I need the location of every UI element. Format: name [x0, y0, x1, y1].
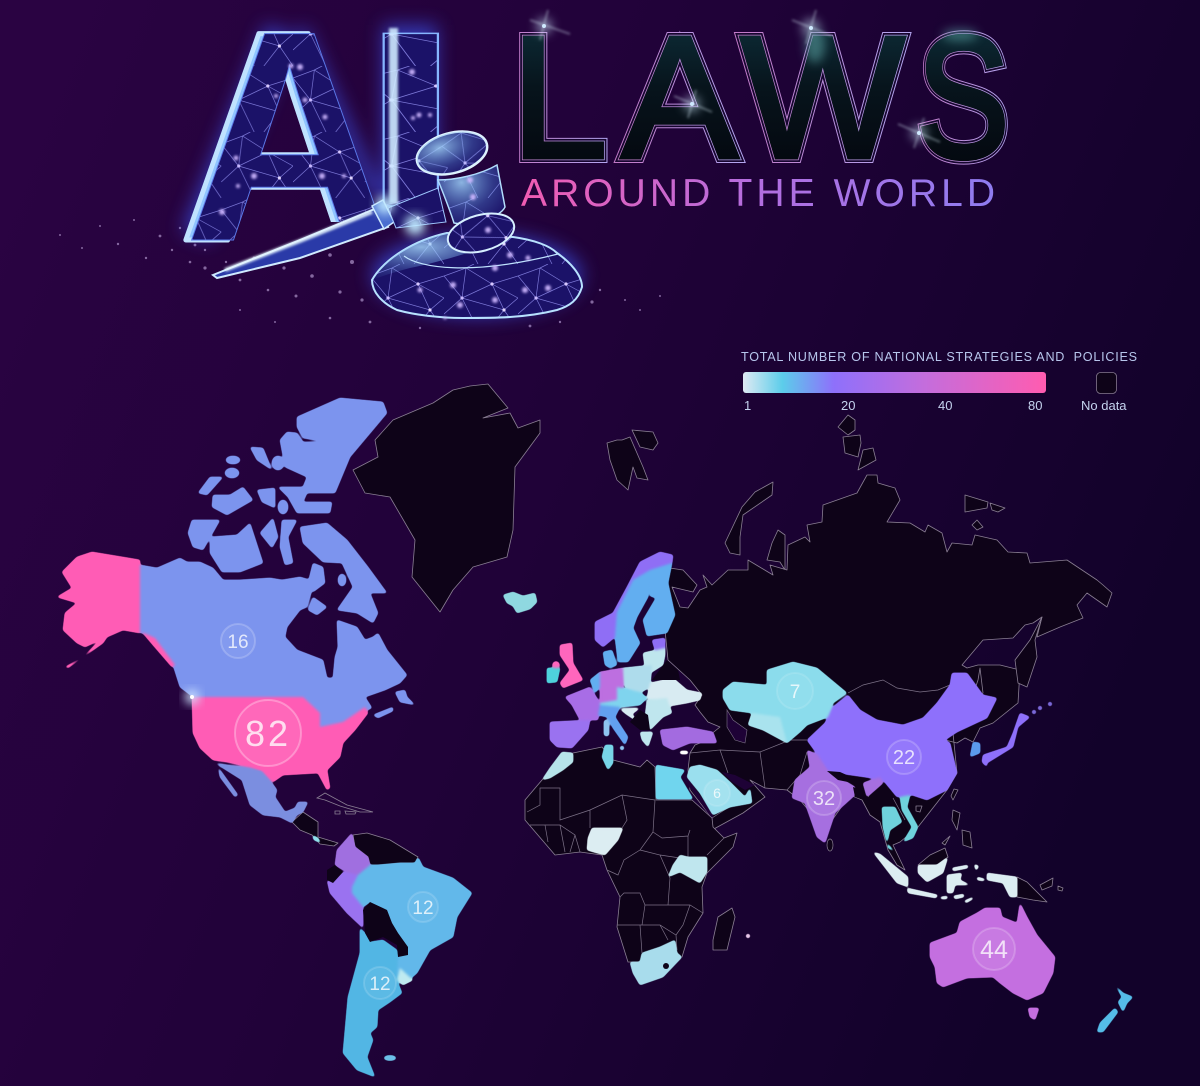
Italy — [598, 705, 628, 745]
title: LAWS: S — [917, 1, 1009, 195]
gavel head — [412, 124, 519, 259]
title: LAWS: L — [511, 0, 607, 194]
title: LAWS: L — [511, 0, 607, 194]
scale labels — [744, 398, 1127, 413]
Colombia — [335, 833, 370, 875]
scale labels: 20 — [841, 398, 855, 413]
Africa borders — [527, 788, 724, 953]
India — [792, 750, 855, 843]
Finland — [643, 563, 675, 636]
Tasmania — [1028, 1008, 1039, 1020]
Taiwan and Hainan — [916, 789, 958, 812]
Alaska panhandle — [142, 632, 175, 667]
gavel base — [372, 233, 582, 318]
title: LAWS: A — [622, 0, 738, 194]
Sweden — [615, 570, 650, 662]
Vietnam — [900, 795, 918, 842]
Caspian Sea — [727, 710, 747, 743]
Papua New Guinea — [1017, 877, 1047, 902]
Alaska — [57, 552, 140, 668]
title: LAWS: A — [622, 0, 738, 194]
title: LAWS — [511, 0, 1009, 195]
value bubble: Brazil 12: 12 — [412, 898, 434, 919]
value bubble: India 32: 32 — [813, 788, 835, 810]
Asia borders — [690, 680, 950, 820]
north-east India — [863, 777, 883, 797]
Spain and Portugal — [550, 720, 590, 748]
Madagascar — [713, 908, 735, 950]
Kazakhstan — [723, 662, 847, 743]
coast sparkle — [185, 690, 199, 704]
Red Sea — [682, 775, 713, 820]
Ireland — [547, 668, 560, 683]
title artwork: AI with gavel — [59, 0, 661, 329]
South Korea — [970, 742, 980, 757]
value bubble: China 22 — [887, 740, 921, 774]
coloured countries — [57, 398, 1133, 1077]
Indonesia — [873, 852, 1017, 903]
Canada — [140, 398, 415, 727]
Bangladesh — [853, 787, 864, 800]
Norway — [595, 552, 673, 647]
value bubble: Saudi Arabia 6 — [704, 780, 730, 806]
legend title: TOTAL NUMBER OF NATIONAL STRATEGIES AND POLICIES — [741, 350, 1137, 364]
Sri Lanka — [827, 839, 833, 851]
Africa — [525, 747, 737, 962]
Uruguay — [397, 968, 413, 985]
Brazil — [352, 857, 472, 985]
legend — [741, 350, 1137, 413]
scale labels: 80 — [1028, 398, 1042, 413]
United Kingdom — [560, 643, 583, 688]
USA — [192, 697, 368, 790]
title: LAWS: L — [511, 0, 607, 194]
Costa Rica — [312, 835, 321, 843]
Falkland Islands — [384, 1056, 396, 1060]
Estonia — [652, 638, 665, 650]
Saudi Arabia — [687, 765, 752, 815]
value bubble: Saudi Arabia 6: 6 — [713, 785, 721, 801]
Greenland — [353, 384, 540, 612]
subtitle: AROUND THE WORLD — [521, 172, 995, 215]
value bubble: Australia 44: 44 — [980, 936, 1008, 964]
title: LAWS: W — [741, 0, 904, 194]
title: LAWS: S — [917, 1, 1009, 195]
Borneo north — [918, 848, 948, 865]
Greece — [640, 732, 653, 747]
scale labels: 1 — [744, 398, 751, 413]
value bubble: USA 82: 82 — [245, 713, 291, 754]
no data swatch — [1096, 372, 1116, 394]
value bubble: Argentina 12 — [364, 967, 396, 999]
value bubble: Kazakhstan 7 — [777, 673, 813, 709]
value bubble: Argentina 12: 12 — [369, 974, 391, 995]
value bubble: India 32 — [807, 781, 841, 815]
title: LAWS: W — [741, 0, 904, 194]
title: LAWS: W — [741, 0, 904, 194]
colour scale — [743, 372, 1046, 393]
Argentina and Chile — [343, 928, 402, 1077]
title sparkles — [530, 10, 978, 148]
glow behind letters — [196, 25, 582, 317]
Russia, Middle East and dark Asia — [663, 475, 1112, 870]
title: LAWS: A — [622, 0, 738, 194]
New Zealand — [1097, 985, 1133, 1032]
title: LAWS: S — [917, 1, 1009, 195]
Japan — [982, 713, 1030, 767]
Poland — [623, 665, 652, 693]
Lesotho — [663, 963, 669, 969]
Baja California — [218, 767, 238, 797]
Bolivia and Paraguay — [363, 902, 408, 957]
Venezuela and the Guianas — [353, 833, 418, 865]
Sakhalin and far-east slivers — [972, 617, 1042, 698]
Central America — [292, 812, 338, 846]
Ecuador — [327, 865, 343, 883]
Thailand — [882, 807, 902, 852]
Mauritius — [746, 934, 750, 938]
Ukraine — [647, 678, 702, 706]
value bubble: Australia 44 — [973, 928, 1015, 970]
Belarus — [652, 660, 680, 680]
Netherlands and Belgium — [590, 672, 600, 693]
central Europe — [600, 687, 647, 707]
scale labels: No data — [1081, 398, 1127, 413]
Nigeria — [587, 828, 623, 855]
Germany — [600, 668, 623, 703]
Sardinia and Sicily — [604, 720, 624, 750]
gavel handle — [213, 188, 446, 278]
Lithuania and Latvia — [643, 648, 665, 672]
Romania and Bulgaria — [645, 698, 672, 730]
value bubble: USA 82 — [235, 700, 301, 766]
Egypt — [656, 765, 693, 799]
glowing network nodes — [219, 64, 551, 320]
Cuba and Hispaniola — [317, 793, 373, 814]
Arctic islands outlines — [607, 415, 1005, 570]
Persian Gulf — [722, 772, 755, 790]
dark land: countries with no data — [292, 384, 1112, 962]
value bubble: China 22: 22 — [893, 747, 915, 769]
scale labels: 40 — [938, 398, 952, 413]
Philippines — [942, 810, 972, 848]
France — [565, 687, 600, 720]
Denmark — [603, 650, 617, 668]
Balkans — [630, 710, 650, 730]
value bubble: Brazil 12 — [408, 892, 438, 922]
Iceland — [503, 592, 537, 613]
dust particles — [59, 219, 661, 329]
Nepal — [827, 771, 858, 784]
value bubble: Canada 16: 16 — [227, 632, 249, 653]
title: LAWS: L — [511, 0, 607, 194]
Kenya — [668, 855, 707, 883]
China — [807, 673, 997, 800]
value bubble: Canada 16 — [221, 624, 255, 658]
Tunisia — [602, 745, 613, 770]
Australia — [930, 903, 1055, 1000]
value bubble: Kazakhstan 7: 7 — [790, 682, 800, 703]
letter A — [183, 31, 374, 242]
Uzbekistan — [748, 713, 787, 743]
title: LAWS: W — [741, 0, 904, 194]
Cyprus — [680, 751, 688, 754]
world map — [57, 384, 1133, 1077]
South Africa — [630, 940, 682, 985]
Peru — [327, 872, 363, 928]
title: LAWS: A — [622, 0, 738, 194]
Morocco — [542, 752, 573, 780]
Pacific islands — [1040, 878, 1063, 891]
title: LAWS: S — [917, 1, 1009, 195]
no-data countries inside coloured regions — [327, 660, 864, 969]
Croatia — [620, 708, 640, 722]
Mexico — [215, 763, 308, 823]
Japan northern islands — [1032, 702, 1052, 714]
Northern Ireland — [552, 662, 560, 668]
Turkey — [660, 727, 717, 750]
